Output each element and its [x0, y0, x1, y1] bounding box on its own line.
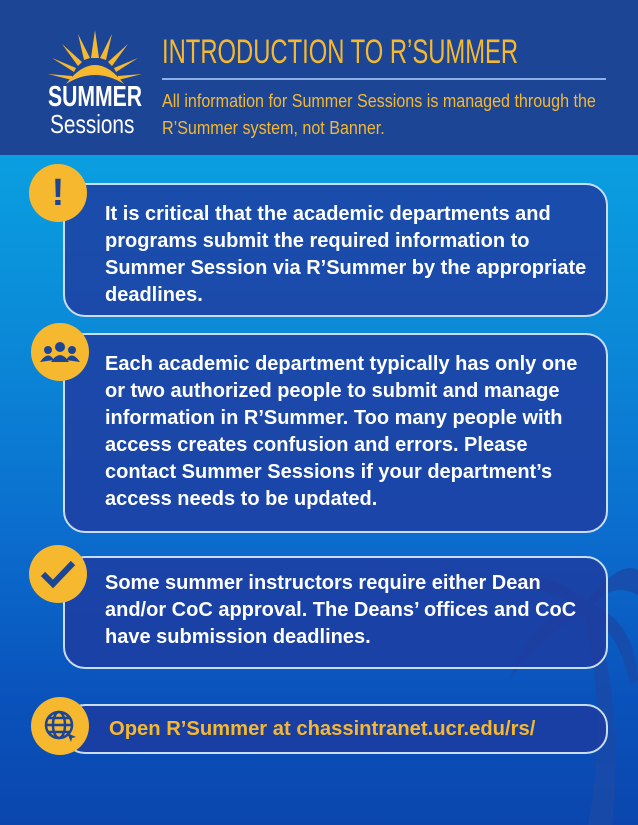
panel: authorized people [63, 333, 608, 533]
logo [48, 30, 142, 139]
panel: critical deadlines: programs submit the required information to [105, 230, 529, 252]
panel: critical deadlines [63, 183, 608, 317]
panel: dean approval: have submission deadlines. [105, 626, 371, 648]
subtitle [162, 90, 596, 138]
icon: exclamation: ! [52, 172, 64, 214]
subtitle: R’Summer system, not Banner. [162, 117, 385, 138]
icon: sun [48, 30, 142, 84]
panel: authorized people: contact Summer Sessions if your department’s [105, 461, 552, 483]
palm tree decoration [510, 568, 638, 825]
panel: link: Open R’Summer at chassintranet.ucr.edu/rs/ [109, 718, 535, 740]
subtitle: All information for Summer Sessions is managed through the [162, 90, 596, 111]
icon: exclamation [29, 164, 87, 222]
panel: critical deadlines: Summer Session via R’Summer by the appropriate [105, 257, 586, 279]
icon: globe [31, 697, 89, 755]
panel: link [63, 704, 608, 754]
panel: authorized people: access needs to be updated. [105, 488, 377, 510]
panel: authorized people: access creates confusion and errors. Please [105, 434, 527, 456]
panel: dean approval [63, 556, 608, 669]
panel: authorized people: Each academic department typically has only one [105, 353, 577, 375]
header band [0, 0, 638, 155]
logo text: SUMMER [48, 81, 142, 113]
panel: authorized people: information in R’Summer. Too many people with [105, 407, 562, 429]
panel: critical deadlines: deadlines. [105, 284, 203, 306]
panel: dean approval: and/or CoC approval. The Deans’ offices and CoC [105, 599, 576, 621]
panel: dean approval: Some summer instructors require either Dean [105, 572, 541, 594]
panel: authorized people: or two authorized people to submit and manage [105, 380, 559, 402]
icon: people [31, 323, 89, 381]
icon: checkmark [29, 545, 87, 603]
title: INTRODUCTION TO R’SUMMER [162, 33, 518, 71]
logo: Sessions [50, 109, 134, 139]
panel: critical deadlines: It is critical that the academic departments and [105, 203, 551, 225]
